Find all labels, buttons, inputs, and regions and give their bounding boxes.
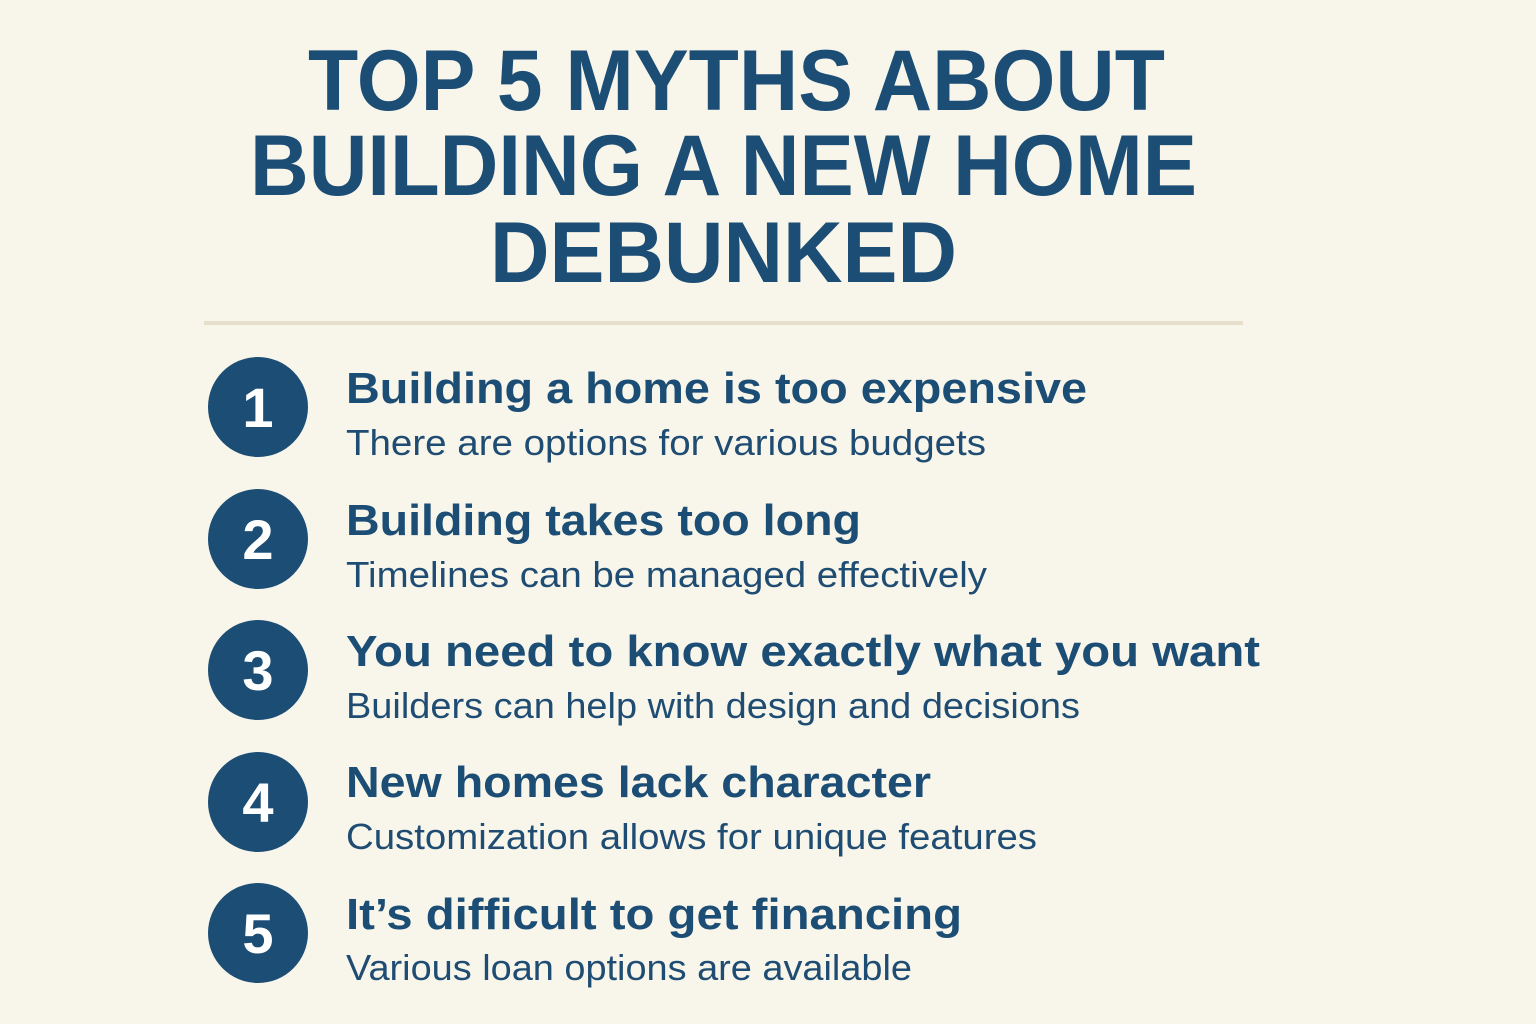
heading: myth 2: Building takes too long [346, 496, 861, 545]
title: BUILDING A NEW HOME [250, 118, 1197, 214]
icon: number 5 circle [208, 883, 308, 983]
icon: number 2 circle: 2 [242, 508, 274, 571]
heading: myth 5: It’s difficult to get financing [346, 890, 962, 939]
text: fact 5: Various loan options are available [346, 947, 912, 988]
icon: number 1 circle [208, 357, 308, 457]
icon: number 4 circle: 4 [242, 771, 274, 834]
title: TOP 5 MYTHS ABOUT [308, 33, 1165, 129]
text: fact 4: Customization allows for unique features [346, 816, 1037, 857]
icon: number 4 circle [208, 752, 308, 852]
heading: myth 1: Building a home is too expensive [346, 364, 1087, 413]
text: fact 3: Builders can help with design and decisions [346, 685, 1080, 726]
myth 5 [208, 883, 962, 988]
myth 4 [208, 752, 1037, 857]
heading: myth 3: You need to know exactly what you want [346, 627, 1260, 676]
icon: number 1 circle: 1 [242, 376, 274, 439]
title [250, 33, 1197, 301]
title: DEBUNKED [490, 205, 957, 301]
icon: number 3 circle [208, 620, 308, 720]
myth 2 [208, 489, 987, 595]
icon: number 3 circle: 3 [242, 639, 274, 702]
myth 3 [208, 620, 1260, 726]
heading: myth 4: New homes lack character [346, 758, 931, 807]
icon: number 5 circle: 5 [242, 902, 274, 965]
text: fact 2: Timelines can be managed effectively [346, 554, 987, 595]
myth 1 [208, 357, 1087, 463]
text: fact 1: There are options for various budgets [346, 422, 986, 463]
icon: number 2 circle [208, 489, 308, 589]
